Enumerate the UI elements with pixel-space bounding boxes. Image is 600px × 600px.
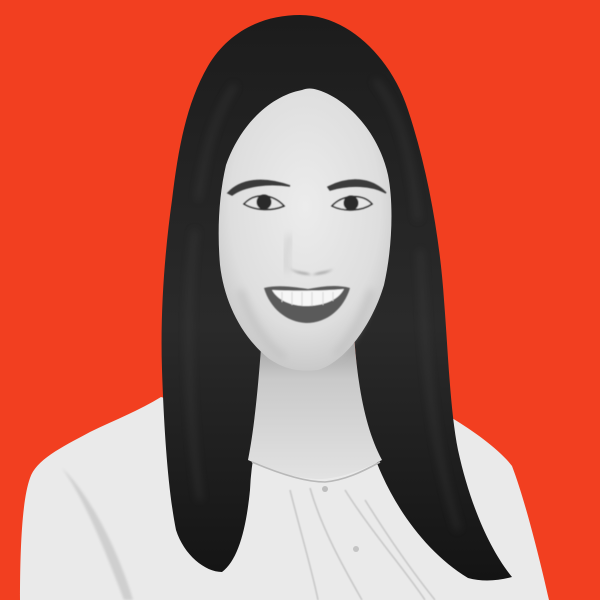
mouth <box>264 286 350 323</box>
left eye <box>244 194 284 210</box>
right eyebrow <box>328 180 386 193</box>
neckline <box>252 462 380 482</box>
right eye <box>332 196 372 210</box>
neck <box>248 335 382 479</box>
blouse <box>20 397 549 600</box>
face <box>219 88 391 371</box>
hair highlights <box>189 80 458 530</box>
hair <box>162 15 512 581</box>
cheek shading <box>240 290 372 358</box>
nose <box>286 235 334 275</box>
left eyebrow <box>228 180 290 195</box>
